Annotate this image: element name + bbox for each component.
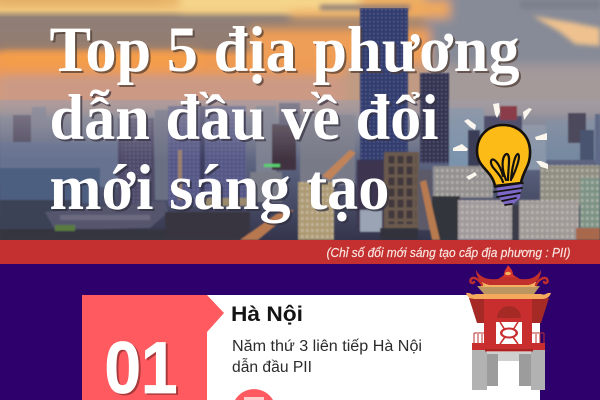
card body — [82, 295, 540, 400]
buildings — [0, 8, 600, 240]
description: dẫn đầu PII — [232, 359, 312, 376]
subtitle note: (Chỉ số đổi mới sáng tạo cấp địa phương : PII) — [326, 245, 570, 260]
rank tab — [82, 295, 224, 400]
deck — [472, 343, 545, 350]
round window — [496, 306, 522, 344]
city ground — [0, 100, 600, 240]
icon: light bulb with rays — [453, 103, 548, 205]
bulb screw base — [494, 183, 523, 205]
icon: Khuê Văn Các gate — [466, 265, 551, 390]
tall towers — [360, 8, 408, 162]
title line 1: Top 5 địa phương — [50, 14, 520, 86]
title line 2: dẫn đầu về đổi — [50, 82, 438, 154]
title line 3: mới sáng tạo — [50, 152, 390, 224]
title — [50, 14, 522, 226]
title line 1: Top 5 địa phương — [52, 16, 522, 88]
panel: photo header of Hanoi skyline at sunset — [0, 0, 600, 240]
bulb glass — [477, 125, 530, 186]
side scrolls — [470, 278, 548, 285]
haze over the distant skyline — [0, 100, 600, 160]
lower roof wings — [469, 298, 485, 323]
description: Năm thứ 3 liên tiếp Hà Nội — [232, 338, 422, 355]
panel: rank 1 Hà Nội card — [82, 295, 540, 400]
top red roof — [476, 270, 541, 285]
gate pillars — [472, 349, 545, 390]
right skyline — [484, 116, 522, 166]
badge circle — [235, 389, 273, 400]
city name: Hà Nội — [231, 303, 303, 326]
sky — [0, 0, 600, 125]
orange eave — [466, 293, 551, 299]
description — [232, 338, 422, 376]
title line 3: mới sáng tạo — [52, 154, 392, 226]
filament — [491, 154, 519, 182]
tower body — [484, 298, 532, 344]
title line 2: dẫn đầu về đổi — [52, 84, 440, 156]
subtitle band — [0, 240, 600, 264]
middle roof — [477, 286, 540, 294]
rays — [453, 103, 548, 180]
balustrade — [474, 333, 544, 344]
panel: purple background — [0, 264, 600, 400]
roof finial — [502, 265, 515, 277]
